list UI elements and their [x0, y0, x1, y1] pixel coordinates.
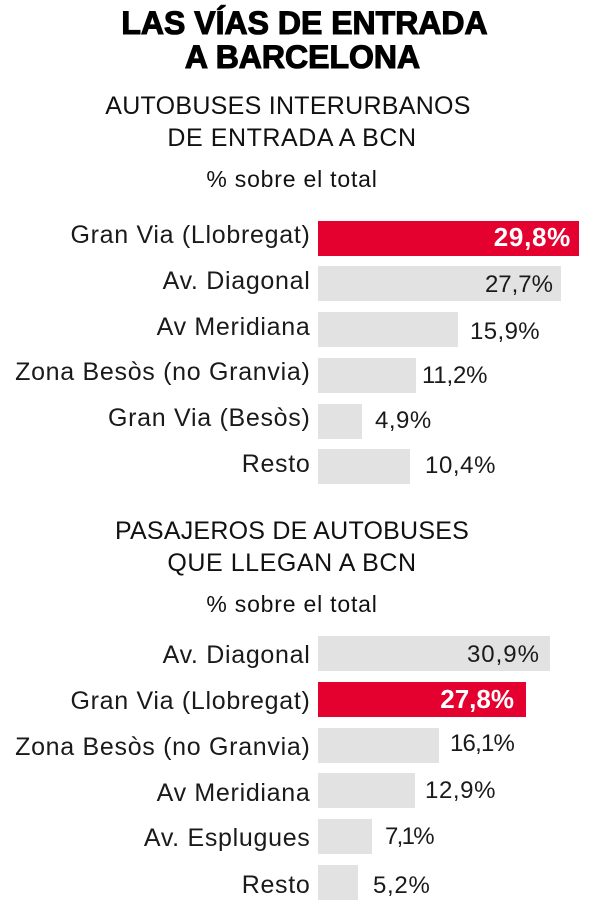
row: Av. Diagonal — [162, 636, 550, 671]
row: Resto: Resto — [242, 871, 310, 899]
row: Zona Besos: Zona Besòs (no Granvia) — [15, 358, 310, 386]
row: Av. Esplugues: 7,1% — [385, 823, 433, 850]
row: Resto: Resto — [242, 450, 310, 478]
row: Av Meridiana: 15,9% — [470, 318, 540, 345]
row: Av Meridiana: Av Meridiana — [157, 313, 310, 341]
row: Av. Esplugues — [144, 819, 434, 854]
row: Av Meridiana: 12,9% — [425, 777, 496, 804]
row: Gran Via Besos: 4,9% — [375, 407, 432, 434]
row: Zona Besos — [15, 728, 514, 763]
bar chart: buses — [15, 221, 579, 484]
row: Gran Via Llobregat: 27,8% — [440, 684, 514, 714]
row: Av Meridiana: Av Meridiana — [157, 779, 310, 807]
row: Av. Diagonal: Av. Diagonal — [163, 641, 310, 669]
row: Av Meridiana — [156, 773, 496, 808]
heading: passengers: QUE LLEGAN A BCN — [167, 549, 417, 577]
row: Av Meridiana — [156, 312, 540, 347]
row: Av. Esplugues: Av. Esplugues — [144, 824, 310, 852]
row: Resto — [242, 865, 431, 900]
heading: buses — [105, 92, 471, 152]
row: Gran Via Besos — [108, 404, 432, 439]
row: Av. Diagonal: Av. Diagonal — [163, 267, 310, 295]
row: Zona Besos: Zona Besòs (no Granvia) — [15, 733, 310, 761]
row: Gran Via Llobregat: Gran Via (Llobregat) — [70, 221, 310, 249]
subtitle: passengers: % sobre el total — [206, 591, 378, 617]
row: Resto — [242, 449, 496, 484]
title: LAS VÍAS DE ENTRADA — [121, 5, 488, 41]
title — [121, 4, 488, 75]
row: Av. Diagonal: 27,7% — [485, 271, 553, 298]
title: A BARCELONA — [185, 39, 420, 75]
subtitle: buses: % sobre el total — [206, 166, 378, 192]
row: Resto: 5,2% — [373, 872, 431, 899]
row: Resto: 10,4% — [425, 452, 496, 479]
heading: passengers — [115, 517, 469, 577]
row: Gran Via Llobregat: Gran Via (Llobregat) — [70, 687, 310, 715]
row: Gran Via Llobregat — [70, 682, 526, 717]
heading: buses: AUTOBUSES INTERURBANOS — [105, 92, 471, 120]
row: Gran Via Llobregat: 29,8% — [494, 222, 571, 252]
row: Zona Besos — [15, 358, 487, 393]
row: Av. Diagonal — [162, 266, 561, 301]
row: Gran Via Besos: Gran Via (Besòs) — [108, 404, 310, 432]
row: Av. Diagonal: 30,9% — [467, 641, 540, 668]
heading: passengers: PASAJEROS DE AUTOBUSES — [115, 517, 469, 545]
row: Zona Besos: 11,2% — [422, 362, 487, 389]
row: Gran Via Llobregat — [70, 221, 579, 256]
heading: buses: DE ENTRADA A BCN — [167, 124, 417, 152]
row: Zona Besos: 16,1% — [450, 730, 514, 757]
